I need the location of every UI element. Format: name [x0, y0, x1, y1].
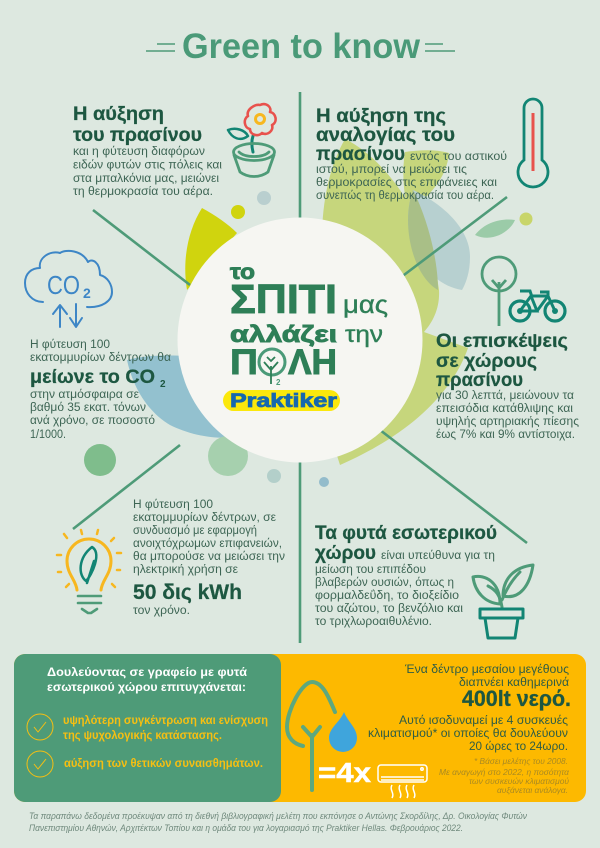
text block: water: Με αναγωγή στο 2022, η ποσότητα — [439, 768, 569, 777]
text block: water: διαπνέει καθημερινά — [459, 675, 569, 689]
text block: green space visits — [436, 330, 579, 441]
panel: office plants — [14, 654, 281, 802]
logo: Praktiker: Praktiker — [230, 391, 338, 412]
icon: check two — [27, 751, 53, 777]
text block: green ratio: πρασίνου — [316, 143, 405, 165]
footnote — [29, 811, 527, 833]
footnote: Τα παραπάνω δεδομένα προέκυψαν από τη διεθνή βιβλιογραφική μελέτη που εκπόνησε ο Αντώνης Σκορδίλης, Δρ. Οικολογίας Φυτών — [29, 811, 527, 821]
text block: green ratio — [316, 105, 507, 202]
text block: greening — [73, 103, 222, 198]
text block: CO2 reduction: εκατομμυρίων δέντρων θα — [30, 352, 171, 364]
panel: centre circle logo: το — [230, 261, 255, 284]
text block: electricity savings: θα μπορούσε να μειώσει την — [133, 551, 285, 563]
text block: green space visits: Οι επισκέψεις — [436, 330, 568, 352]
panel heading: εσωτερικού χώρου επιτυγχάνεται: — [47, 682, 246, 694]
panel: yellow tree water — [14, 654, 586, 802]
text block: indoor plants: φορμαλδεΰδη, το διοξείδιο — [315, 590, 459, 602]
text block: green ratio: συνεπώς τη θερμοκρασία του αέρα. — [316, 190, 494, 202]
text block: indoor plants: χώρου — [315, 542, 376, 564]
text block: green space visits: πρασίνου — [436, 369, 523, 391]
text block: electricity savings: ηλεκτρική χρήση σε — [133, 564, 238, 576]
icon: air conditioner — [378, 765, 427, 798]
equals four times: =4x — [318, 757, 371, 788]
icon: CO2 cloud: CO — [47, 270, 80, 300]
icon: CO2 cloud: 2 — [83, 285, 91, 301]
text block: green ratio: αναλογίας του — [316, 124, 455, 146]
text block: water: των συσκευών κλιματισμού — [469, 777, 570, 786]
text block: greening: Η αύξηση — [73, 103, 164, 125]
panel: centre circle logo: ΣΠΙΤΙ — [230, 276, 337, 322]
text block: CO2 reduction: 2 — [160, 379, 166, 390]
text block: green space visits: σε χώρους — [436, 350, 537, 372]
benefit one: της ψυχολογικής κατάστασης. — [63, 730, 222, 742]
text block: green space visits: για 30 λεπτά, μειώνουν τα — [436, 390, 574, 402]
benefit one: υψηλότερη συγκέντρωση και ενίσχυση — [63, 715, 268, 727]
text block: green ratio: ιστού, μπορεί να μειώσει τις — [316, 164, 467, 176]
panel: centre circle logo: την — [345, 321, 383, 347]
benefit one — [63, 715, 268, 742]
text block: indoor plants: είναι υπεύθυνα για τη — [381, 550, 495, 562]
icon: CO2 cloud — [25, 251, 112, 327]
text block: indoor plants: βλαβερών ουσιών, όπως η — [315, 577, 454, 589]
text block: indoor plants: Τα φυτά εσωτερικού — [315, 522, 497, 544]
icon: check one — [27, 714, 53, 740]
panel: centre circle logo: αλλάζει — [230, 321, 337, 347]
text block: electricity savings: εκατομμυρίων δέντρων, σε — [133, 512, 276, 524]
text block: green space visits: έως 7% και 9% αντίστοιχα. — [436, 429, 575, 441]
footnote: Πανεπιστημίου Αθηνών, Αρχιτέκτων Τοπίου και η ομάδα του για λογαριασμό της Praktiker Hellas. Φεβρουάριος 2022. — [29, 823, 463, 833]
icon: light bulb — [57, 530, 121, 613]
text block: electricity savings: συνδυασμό με εφαρμογή — [133, 525, 257, 537]
panel heading — [47, 667, 247, 694]
icon: tree and bicycle — [482, 257, 565, 326]
text block: water: 20 ώρες το 24ωρο. — [469, 739, 568, 753]
text block: water: κλιματισμού* οι οποίες θα δουλεύουν — [368, 726, 568, 740]
text block: indoor plants — [315, 522, 497, 628]
text block: greening: του πρασίνου — [73, 124, 202, 146]
text block: CO2 reduction: βαθμό 35 εκατ. τόνων — [30, 402, 146, 414]
text block: CO2 reduction: ανά χρόνο, σε ποσοστό — [30, 415, 155, 427]
text block: green ratio: εντός του αστικού — [410, 151, 507, 163]
text block: electricity savings: 50 δις kWh — [133, 581, 242, 604]
text block: water: αυξάνεται ανάλογα. — [497, 786, 568, 795]
text block: water: 400lt νερό. — [462, 686, 571, 711]
text block: CO2 reduction — [30, 339, 171, 441]
spoke lines — [73, 92, 527, 643]
text block: electricity savings: Η φύτευση 100 — [133, 499, 213, 511]
icon: potted plant — [473, 565, 533, 638]
text block: greening: τη θερμοκρασία του αέρα. — [73, 186, 213, 198]
text block: greening: στα μπαλκόνια μας, μειώνει — [73, 173, 219, 185]
text block: water: Αυτό ισοδυναμεί με 4 συσκευές — [399, 713, 568, 727]
background leaves and dots — [84, 139, 532, 487]
text block: water: * Βάσει μελέτης του 2008. — [474, 757, 568, 766]
text block: greening: και η φύτευση διαφόρων — [73, 146, 205, 158]
text block: greening: ειδών φυτών στις πόλεις και — [73, 160, 222, 172]
icon: flower pot — [228, 104, 276, 176]
benefit two: αύξηση των θετικών συναισθημάτων. — [64, 758, 263, 770]
panel: centre circle logo: 2 — [276, 378, 281, 387]
text block: indoor plants: του αζώτου, το βενζόλιο και — [315, 603, 463, 615]
text block: green space visits: υψηλής αρτηριακής πίεσης — [436, 416, 579, 428]
icon: thermometer — [518, 99, 548, 187]
text block: electricity savings: τον χρόνο. — [133, 605, 190, 617]
text block: green ratio: θερμοκρασίες στις επιφάνειες και — [316, 177, 497, 189]
text block: water — [368, 662, 571, 795]
panel: centre circle logo — [178, 218, 422, 462]
panel heading: Δουλεύοντας σε γραφείο με φυτά — [47, 667, 247, 679]
text block: CO2 reduction: 1/1000. — [30, 429, 66, 441]
text block: CO2 reduction: μείωνε το CO — [30, 366, 155, 388]
text block: indoor plants: το τριχλωροαιθυλένιο. — [315, 616, 432, 628]
text block: water: Ένα δέντρο μεσαίου μεγέθους — [404, 662, 569, 676]
logo: Praktiker — [223, 390, 340, 412]
panel: centre circle logo: μας — [343, 291, 388, 319]
text block: CO2 reduction: στην ατμόσφαιρα σε — [30, 389, 139, 401]
text block: green ratio: Η αύξηση της — [316, 105, 446, 127]
panel: centre circle logo: Π — [230, 343, 258, 382]
title: Green to know — [182, 27, 421, 66]
text block: green space visits: επεισόδια κατάθλιψης και — [436, 403, 573, 415]
text block: electricity savings — [133, 499, 285, 617]
text block: electricity savings: ανοιχτόχρωμων επιφανειών, — [133, 538, 282, 550]
panel: centre circle logo: ΛΗ — [288, 343, 337, 382]
text block: CO2 reduction: Η φύτευση 100 — [30, 339, 110, 351]
text block: indoor plants: μείωση του επιπέδου — [315, 564, 426, 576]
icon: tree — [287, 682, 335, 790]
icon: water drop — [329, 712, 357, 752]
